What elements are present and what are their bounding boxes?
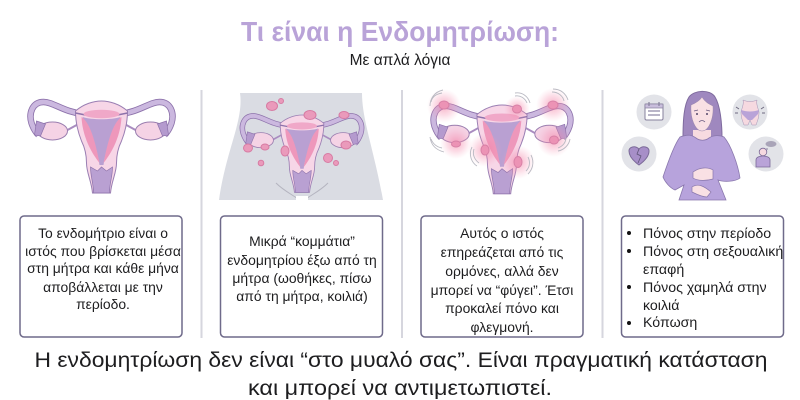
panel: why it hurts: προκαλεί πόνο και [445, 300, 559, 316]
panel: endometrium definition: στη μήτρα και κάθε μήνα [27, 260, 179, 276]
dividers [200, 90, 604, 338]
illustration: uterus anatomy [31, 101, 172, 193]
panel: what endometriosis is: από τη μήτρα, κοιλιά) [236, 288, 368, 304]
illustration: inflamed lesions [427, 88, 571, 194]
closing message: Η ενδομητρίωση δεν είναι “στο μυαλό σας”. Είναι πραγματική κατάσταση [34, 349, 768, 372]
panel: why it hurts: ορμόνες, αλλά δεν [445, 263, 559, 279]
panel: what endometriosis is: Μικρά “κομμάτια” [249, 233, 355, 249]
panel: why it hurts: φλεγμονή. [470, 319, 534, 335]
panel: endometrium definition: ιστός που βρίσκεται μέσα [25, 243, 181, 259]
closing message: και μπορεί να αντιμετωπιστεί. [248, 377, 552, 400]
panel: symptoms list: Πόνος χαμηλά στην [643, 280, 767, 296]
icon: calendar [636, 94, 672, 130]
illustration: woman with symptoms [622, 91, 784, 200]
panel: endometrium definition: περίοδο. [76, 296, 130, 312]
icon: broken heart [622, 136, 656, 172]
closing message [34, 349, 768, 400]
woman [663, 91, 740, 200]
panel: why it hurts [421, 216, 583, 337]
title: Τι είναι η Ενδομητρίωση: [241, 16, 559, 47]
panel: symptoms list [622, 216, 784, 337]
panel: why it hurts: επηρεάζεται από τις [441, 244, 564, 260]
illustration: endometrial implants outside the uterus [219, 93, 383, 201]
panel: what endometriosis is: μήτρα (ωοθήκες, πίσω [232, 270, 372, 286]
panel: symptoms list: Κόπωση [643, 315, 697, 331]
panel: symptoms list: επαφή [643, 262, 684, 278]
panel: symptoms list: Πόνος στην περίοδο [643, 226, 771, 242]
panel: endometrium definition: Το ενδομήτριο είναι ο [38, 225, 168, 241]
panel: what endometriosis is [220, 216, 382, 337]
panel: endometrium definition: αποβάλλεται με την [43, 279, 163, 295]
icon: person with thought bubble [748, 136, 784, 172]
panel: why it hurts: Αυτός ο ιστός [460, 225, 544, 241]
icon: lower body pain [732, 94, 768, 130]
panel: symptoms list: Πόνος στη σεξουαλική [643, 244, 783, 260]
subtitle: Με απλά λόγια [350, 52, 450, 69]
panel: why it hurts: μπορεί να “φύγει”. Έτσι [431, 282, 573, 298]
panel: symptoms list: κοιλιά [643, 298, 679, 314]
panel: endometrium definition [20, 216, 182, 337]
panel: what endometriosis is: ενδομητρίου έξω από τη [227, 252, 377, 268]
